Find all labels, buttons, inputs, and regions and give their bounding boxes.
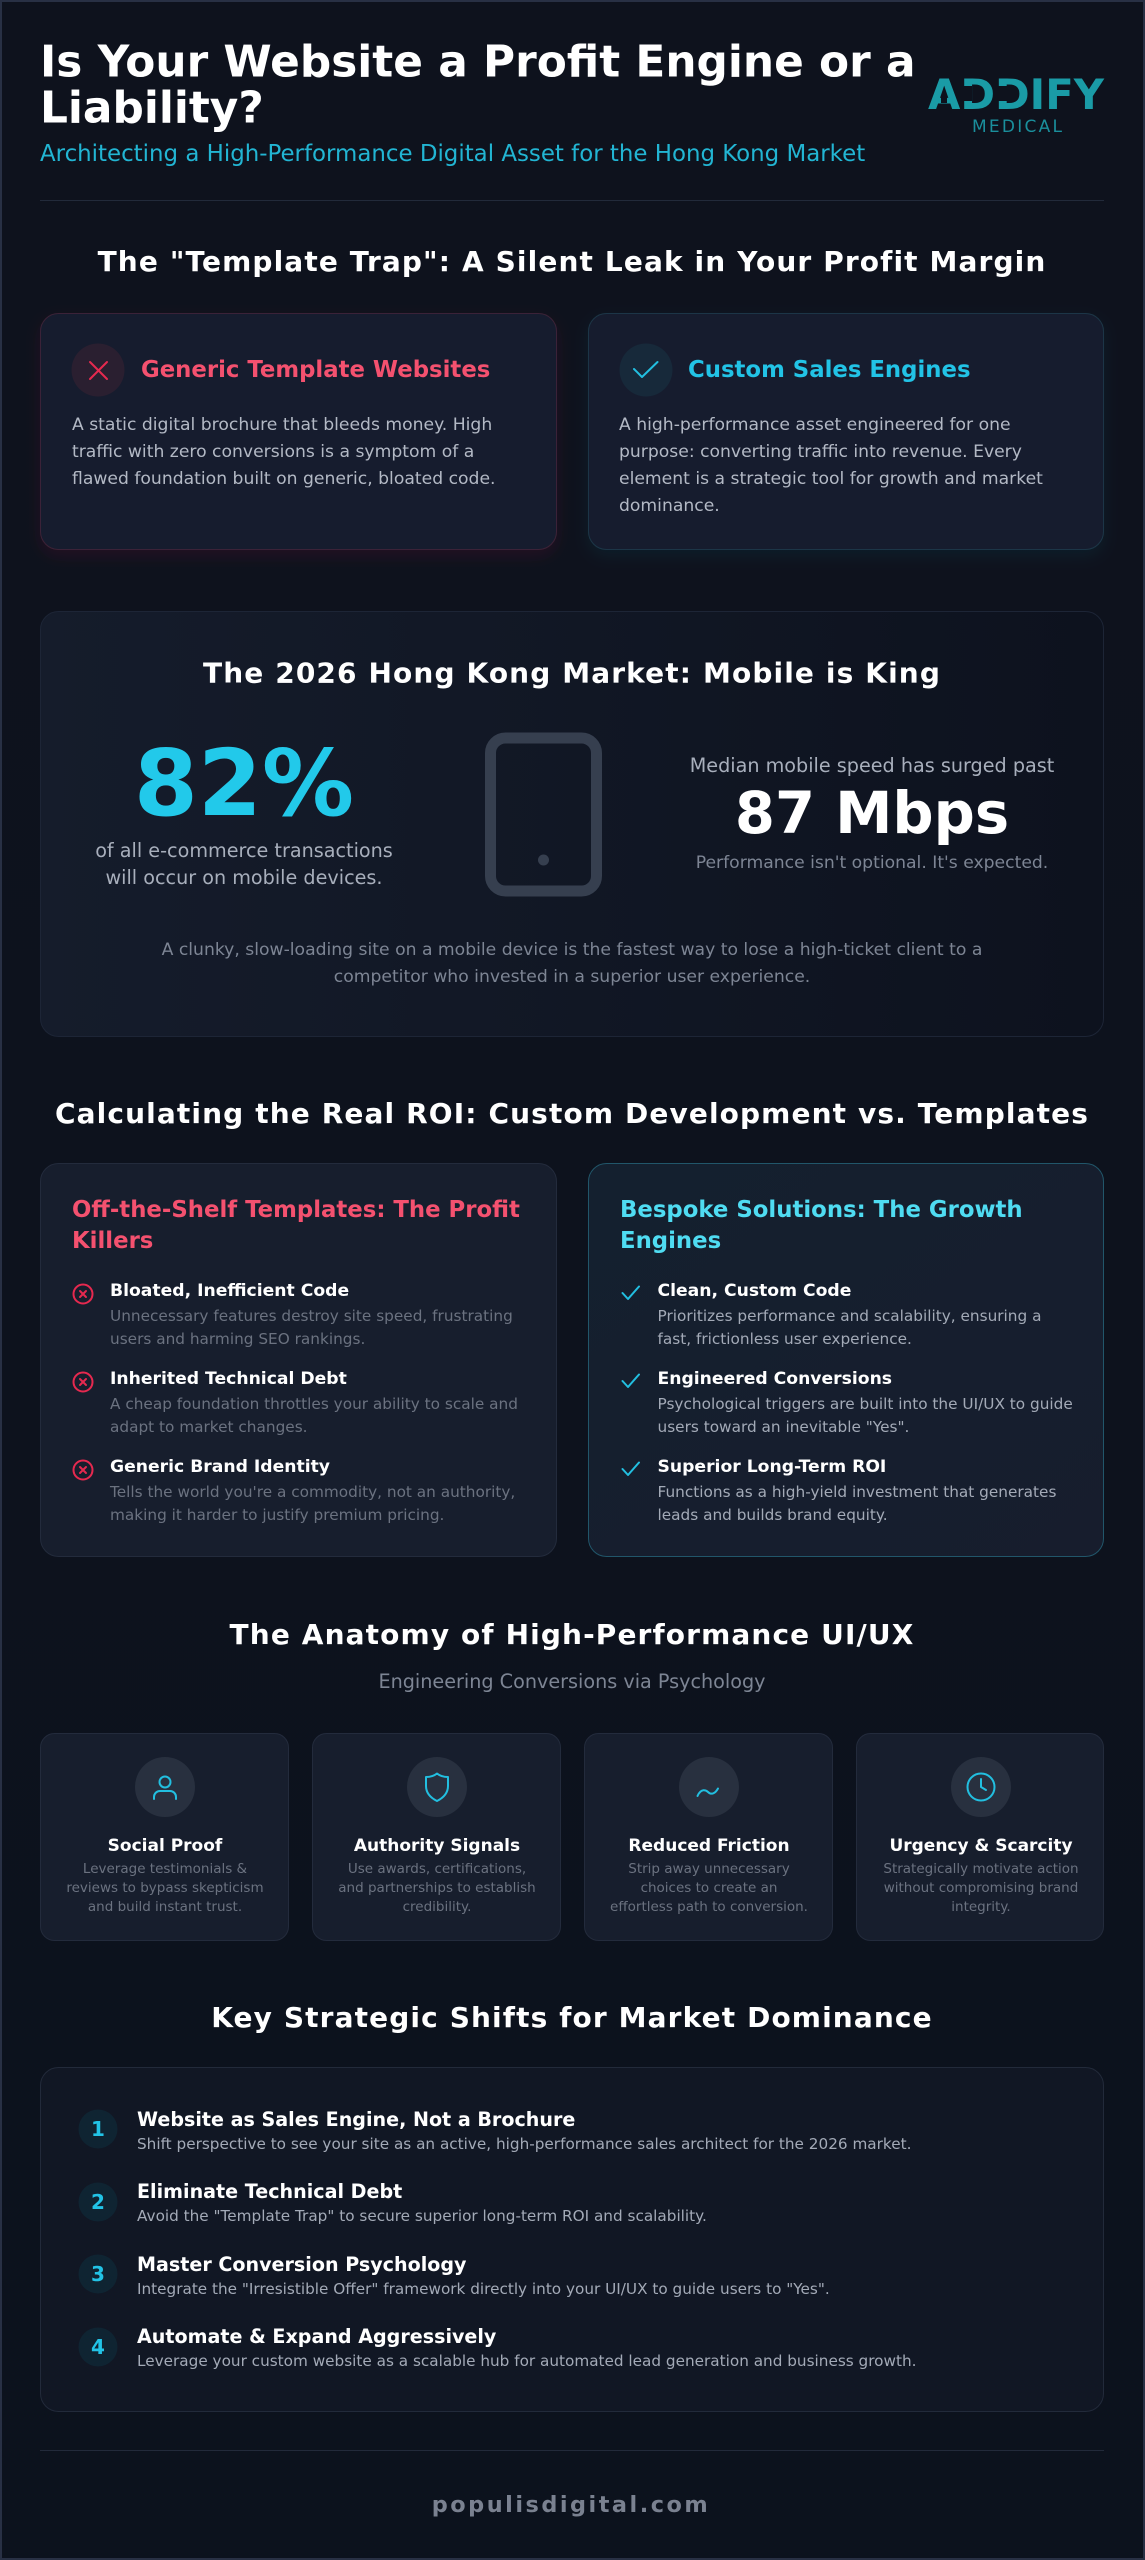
card text: effortless path to conversion.	[610, 1899, 808, 1915]
shift 3: Master Conversion Psychology	[137, 2253, 467, 2276]
card text	[66, 1861, 264, 1915]
note	[162, 940, 982, 987]
card text: and build instant trust.	[88, 1899, 242, 1915]
stat: 87 Mbps: Performance isn't optional. It's expected.	[696, 853, 1048, 873]
item: clean code: Prioritizes performance and scalability, ensuring a	[658, 1307, 1041, 1325]
item: bloated code: users and harming SEO rankings.	[110, 1330, 365, 1348]
card text: element is a strategic tool for growth and market	[619, 469, 1043, 489]
item: technical debt: Inherited Technical Debt	[110, 1369, 347, 1389]
panel: generic template websites	[40, 314, 556, 550]
panel: bespoke	[588, 1164, 1104, 1556]
card: reduced friction: Reduced Friction	[628, 1836, 790, 1856]
item: bloated code	[74, 1281, 513, 1348]
panel: mobile is king	[40, 612, 1104, 1036]
section subheading: Engineering Conversions via Psychology	[378, 1670, 766, 1693]
shift 2	[78, 2180, 707, 2225]
item: long-term ROI: Superior Long-Term ROI	[658, 1457, 886, 1477]
stat: 82%	[95, 730, 393, 889]
card: authority signals	[312, 1734, 560, 1940]
logo: Addify Medical: MEDICAL	[972, 117, 1063, 137]
page title	[40, 36, 916, 134]
card title: Custom Sales Engines	[688, 357, 971, 383]
panel: custom sales engines	[588, 314, 1104, 550]
stat: 82%: 82%	[134, 730, 354, 837]
shift 3	[78, 2253, 830, 2298]
shift 1: 1	[91, 2117, 105, 2141]
shift 3: 3	[91, 2262, 105, 2286]
card text: reviews to bypass skepticism	[66, 1880, 264, 1896]
shift 4: 4	[91, 2335, 105, 2359]
card text: without compromising brand	[884, 1880, 1078, 1896]
page title: Liability?	[40, 82, 264, 134]
item: engineered conversions: users toward an inevitable "Yes".	[658, 1418, 909, 1436]
card text: Use awards, certifications,	[348, 1861, 526, 1877]
shift 2: 2	[91, 2190, 105, 2214]
stat: 82%: of all e-commerce transactions	[95, 839, 393, 862]
item: brand identity: Generic Brand Identity	[110, 1457, 330, 1477]
panel title: Off-the-Shelf Templates: The Profit	[72, 1197, 520, 1223]
item: technical debt: A cheap foundation throttles your ability to scale and	[110, 1395, 518, 1413]
item: long-term ROI	[622, 1457, 1056, 1524]
card: social proof: Social Proof	[108, 1836, 223, 1856]
item: long-term ROI: Functions as a high-yield investment that generates	[658, 1483, 1056, 1501]
card text: and partnerships to establish	[338, 1880, 536, 1896]
stat: 87 Mbps: Median mobile speed has surged past	[690, 754, 1055, 777]
item: engineered conversions: Engineered Conversions	[658, 1369, 892, 1389]
item: engineered conversions	[622, 1369, 1073, 1436]
card text: integrity.	[951, 1899, 1011, 1915]
panel title: Engines	[620, 1228, 721, 1254]
card text: dominance.	[619, 496, 720, 516]
card text: purpose: converting traffic into revenue. Every	[619, 442, 1022, 462]
icon: wave	[679, 1757, 739, 1817]
card: authority signals: Authority Signals	[354, 1836, 520, 1856]
shift 1: Website as Sales Engine, Not a Brochure	[137, 2108, 575, 2131]
card text: A high-performance asset engineered for one	[619, 415, 1011, 435]
item: technical debt	[74, 1369, 518, 1436]
icon: shield	[407, 1757, 467, 1817]
panel title	[72, 1197, 520, 1254]
heading: The 2026 Hong Kong Market: Mobile is King	[203, 656, 941, 690]
item: engineered conversions: Psychological triggers are built into the UI/UX to guide	[658, 1395, 1073, 1413]
panel title: Bespoke Solutions: The Growth	[620, 1197, 1023, 1223]
note: A clunky, slow-loading site on a mobile device is the fastest way to lose a high-ticket client to a	[162, 940, 982, 960]
card text: Leverage testimonials &	[83, 1861, 248, 1877]
shift 1	[78, 2108, 911, 2153]
panel: strategic shifts	[40, 2068, 1104, 2412]
item: bloated code: Bloated, Inefficient Code	[110, 1281, 349, 1301]
item: long-term ROI: leads and builds brand equity.	[658, 1506, 888, 1524]
heading: anatomy: The Anatomy of High-Performance UI/UX	[230, 1618, 914, 1651]
item: brand identity: making it harder to justify premium pricing.	[110, 1506, 444, 1524]
icon: person	[135, 1757, 195, 1817]
shift 4: Leverage your custom website as a scalable hub for automated lead generation and business growth.	[137, 2352, 916, 2370]
heading: real ROI: Calculating the Real ROI: Custom Development vs. Templates	[55, 1097, 1089, 1130]
icon: red cross	[72, 344, 124, 396]
card: reduced friction	[584, 1734, 832, 1940]
card text: traffic with zero conversions is a symptom of a	[72, 442, 474, 462]
card: urgency and scarcity	[856, 1734, 1104, 1940]
subtitle: Architecting a High-Performance Digital Asset for the Hong Kong Market	[40, 141, 865, 167]
panel: templates	[40, 1164, 556, 1556]
card text: choices to create an	[641, 1880, 777, 1896]
item: technical debt: adapt to market changes.	[110, 1418, 308, 1436]
stat: 87 Mbps: 87 Mbps	[735, 780, 1009, 847]
card text: Strip away unnecessary	[628, 1861, 790, 1877]
item: clean code: fast, frictionless user experience.	[658, 1330, 912, 1348]
card text	[72, 415, 495, 489]
icon: cyan check	[620, 344, 672, 396]
shift 4: Automate & Expand Aggressively	[137, 2325, 497, 2348]
item: bloated code: Unnecessary features destroy site speed, frustrating	[110, 1307, 513, 1325]
stat: 87 Mbps	[690, 754, 1055, 873]
card: urgency and scarcity: Urgency & Scarcity	[889, 1836, 1073, 1856]
heading: template trap: The "Template Trap": A Silent Leak in Your Profit Margin	[98, 245, 1046, 278]
panel title: Killers	[72, 1228, 153, 1254]
shift 2: Avoid the "Template Trap" to secure superior long-term ROI and scalability.	[137, 2207, 707, 2225]
panel title	[620, 1197, 1023, 1254]
card text	[883, 1861, 1079, 1915]
item: brand identity	[74, 1457, 515, 1524]
shift 2: Eliminate Technical Debt	[137, 2180, 402, 2203]
card text: Strategically motivate action	[883, 1861, 1079, 1877]
card text: A static digital brochure that bleeds money. High	[72, 415, 492, 435]
heading: key shifts: Key Strategic Shifts for Market Dominance	[211, 2001, 933, 2034]
logo: Addify Medical: ADDIFY	[928, 70, 1105, 119]
item: clean code	[622, 1281, 1041, 1348]
item: brand identity: Tells the world you're a commodity, not an authority,	[109, 1483, 515, 1501]
icon: clock	[951, 1757, 1011, 1817]
footer: populisdigital.com	[432, 2492, 710, 2518]
stat: 82%: will occur on mobile devices.	[105, 866, 383, 889]
page title: Is Your Website a Profit Engine or a	[40, 36, 916, 88]
card title: Generic Template Websites	[141, 357, 490, 383]
card text	[610, 1861, 808, 1915]
icon: smartphone	[490, 738, 596, 891]
card: social proof	[40, 1734, 288, 1940]
item: clean code: Clean, Custom Code	[658, 1281, 851, 1301]
shift 3: Integrate the "Irresistible Offer" framework directly into your UI/UX to guide users to "Yes".	[137, 2280, 830, 2298]
card text	[338, 1861, 536, 1915]
card text	[619, 415, 1043, 516]
shift 1: Shift perspective to see your site as an active, high-performance sales architect for the 2026 market.	[137, 2135, 911, 2153]
note: competitor who invested in a superior user experience.	[334, 967, 810, 987]
card text: flawed foundation built on generic, bloated code.	[72, 469, 495, 489]
shift 4	[78, 2325, 916, 2370]
card text: credibility.	[403, 1899, 471, 1915]
